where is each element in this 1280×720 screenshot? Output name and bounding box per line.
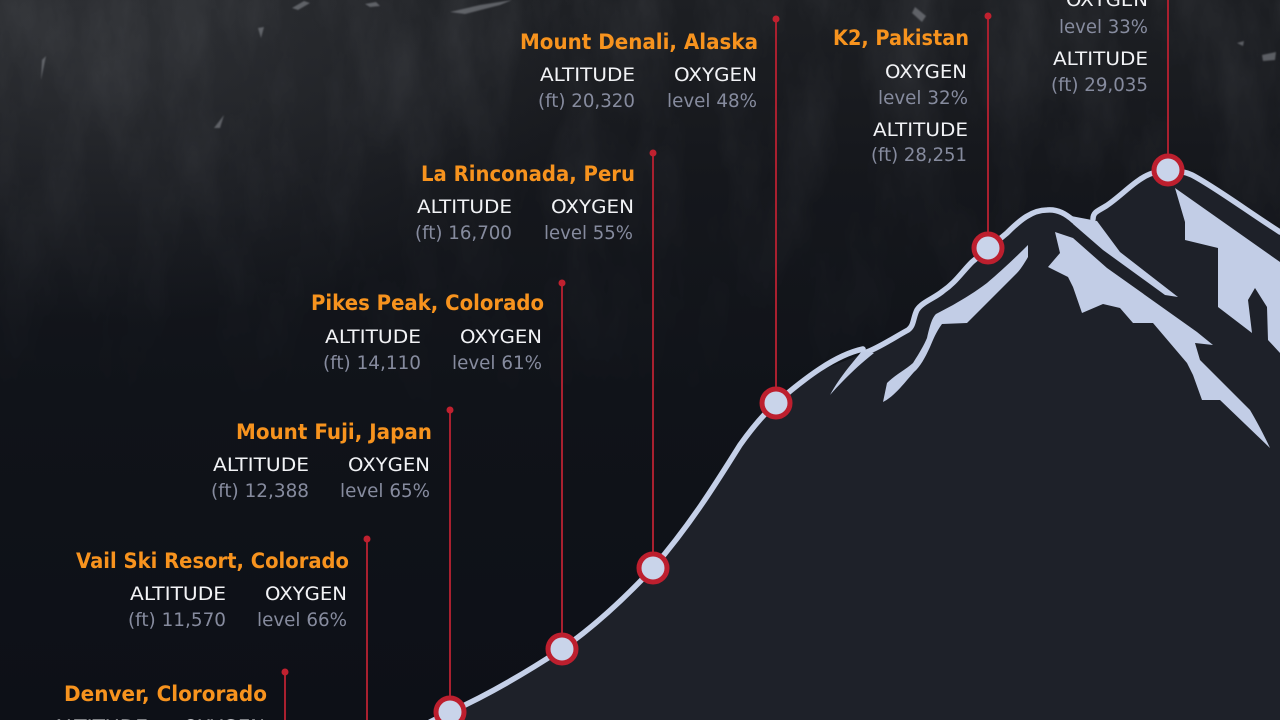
label: Mount Denali, Alaska: level 48%	[667, 90, 757, 112]
label: K2, Pakistan: (ft) 28,251	[871, 144, 967, 166]
ridge outline	[430, 171, 1280, 720]
marker: La Rinconada	[639, 150, 667, 582]
label: Pikes Peak, Colorado	[311, 291, 544, 374]
label: Vail Ski Resort, Colorado: (ft) 11,570	[128, 609, 226, 631]
label: Mount Fuji, Japan: (ft) 12,388	[211, 480, 309, 502]
label: Denver, Clororado: Denver, Clororado	[64, 682, 267, 706]
label: Mount Fuji, Japan: OXYGEN	[348, 454, 430, 476]
label: Pikes Peak, Colorado: (ft) 14,110	[323, 352, 421, 374]
label: La Rinconada, Peru: (ft) 16,700	[415, 222, 512, 244]
label: Mount Fuji, Japan	[211, 420, 432, 502]
label: K2, Pakistan: level 32%	[878, 87, 968, 109]
background: dark rock face	[0, 0, 1280, 308]
label: K2, Pakistan: K2, Pakistan	[833, 26, 969, 50]
label: summit readings: level 33%	[1059, 16, 1148, 38]
label: Mount Fuji, Japan: level 65%	[340, 480, 430, 502]
label: Pikes Peak, Colorado: OXYGEN	[460, 326, 542, 348]
label: summit readings: (ft) 29,035	[1051, 74, 1148, 96]
label: Mount Denali, Alaska: Mount Denali, Alaska	[520, 30, 758, 54]
label: K2, Pakistan: OXYGEN	[885, 61, 967, 83]
label: Vail Ski Resort, Colorado: level 66%	[257, 609, 347, 631]
label: K2, Pakistan: ALTITUDE	[873, 119, 968, 141]
label: Vail Ski Resort, Colorado	[76, 549, 349, 631]
label: La Rinconada, Peru: OXYGEN	[551, 196, 634, 218]
label: La Rinconada, Peru	[415, 162, 635, 244]
label: La Rinconada, Peru: ALTITUDE	[417, 196, 512, 218]
label: Mount Denali, Alaska	[520, 30, 758, 112]
label: Vail Ski Resort, Colorado: Vail Ski Resort, Colorado	[76, 549, 349, 573]
marker: Pikes Peak	[548, 280, 576, 663]
label: Mount Fuji, Japan: Mount Fuji, Japan	[236, 420, 432, 444]
label: Pikes Peak, Colorado: level 61%	[452, 352, 542, 374]
label: summit readings: ALTITUDE	[1053, 48, 1148, 70]
label: Mount Denali, Alaska: OXYGEN	[674, 64, 757, 86]
label: Mount Denali, Alaska: (ft) 20,320	[538, 90, 635, 112]
label: La Rinconada, Peru: level 55%	[544, 222, 633, 244]
marker: Denver	[282, 668, 288, 720]
label: K2, Pakistan	[833, 26, 969, 166]
label: Denver, Clororado	[52, 682, 267, 720]
label: Vail Ski Resort, Colorado: OXYGEN	[265, 583, 347, 605]
mountain silhouette	[430, 170, 1280, 720]
snow patches	[830, 188, 1280, 448]
label: Mount Denali, Alaska: ALTITUDE	[540, 64, 635, 86]
label: Pikes Peak, Colorado: ALTITUDE	[325, 326, 421, 348]
label: summit readings	[1051, 0, 1148, 96]
marker: K2	[974, 12, 1002, 262]
label: Pikes Peak, Colorado: Pikes Peak, Colorado	[311, 291, 544, 315]
marker: Mount Fuji	[436, 406, 464, 720]
label: Mount Fuji, Japan: ALTITUDE	[213, 454, 309, 476]
label: Vail Ski Resort, Colorado: ALTITUDE	[130, 583, 226, 605]
label: La Rinconada, Peru: La Rinconada, Peru	[421, 162, 635, 186]
marker: summit	[1154, 0, 1182, 184]
marker: Vail Ski Resort	[364, 536, 370, 720]
marker: Mount Denali	[762, 16, 790, 417]
